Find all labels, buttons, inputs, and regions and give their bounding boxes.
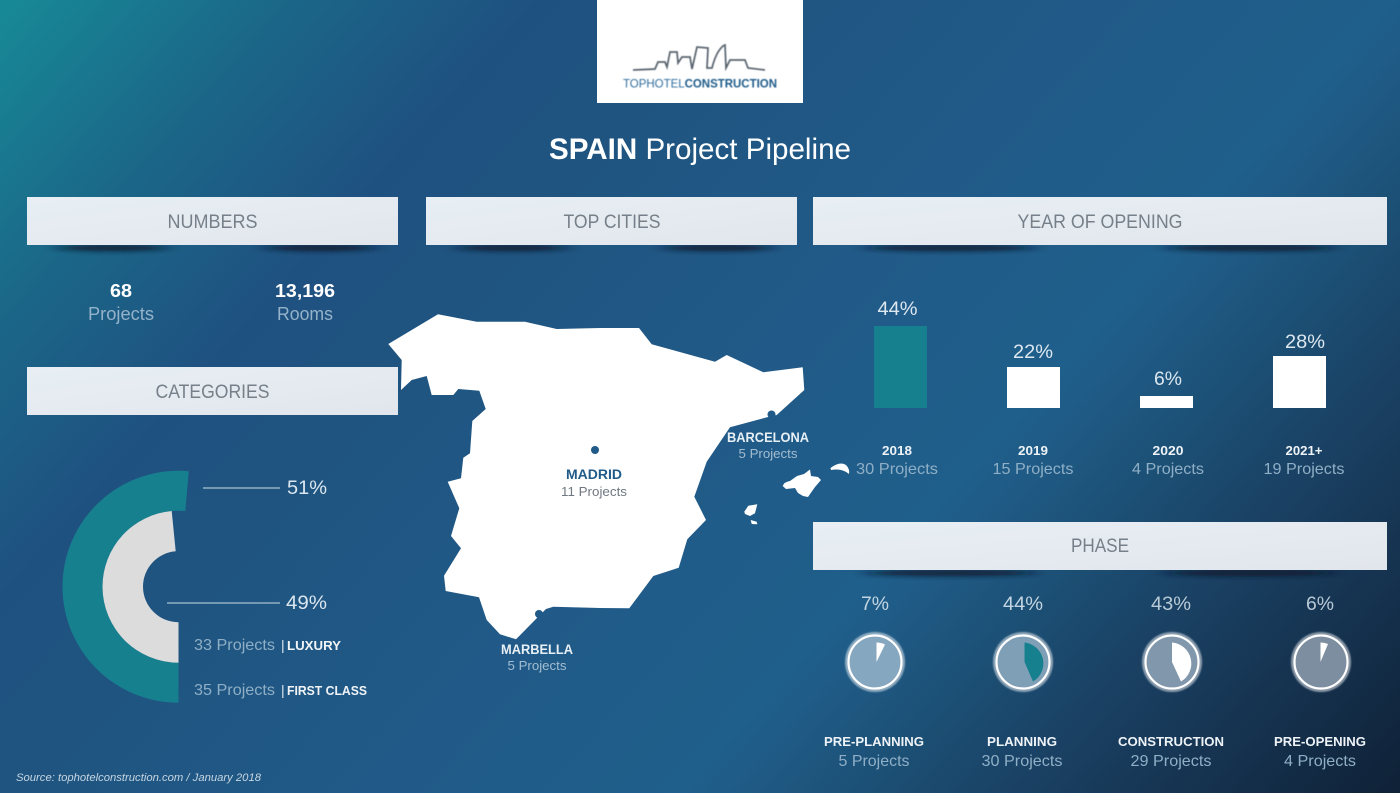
panel header: top cities: TOP CITIES (564, 212, 660, 233)
legend: luxury: LUXURY (287, 638, 341, 653)
legend: luxury (194, 637, 341, 654)
island: formentera (751, 520, 757, 524)
island: ibiza (744, 504, 757, 516)
bar: 2019: 22% (1013, 342, 1053, 363)
chart: categories donut (62, 471, 189, 703)
phase: planning: 44% (1003, 594, 1043, 615)
icon: skyline (633, 45, 765, 70)
panel header: year of opening: YEAR OF OPENING (1018, 212, 1182, 233)
phase: planning: 30 Projects (982, 753, 1062, 770)
legend: luxury: | (281, 637, 285, 653)
logo (597, 0, 803, 103)
stat: rooms: 13,196 (275, 281, 335, 301)
bar: 2019: 2019 (1018, 443, 1048, 458)
legend: first class: FIRST CLASS (287, 683, 367, 698)
panel header: phase (813, 522, 1387, 576)
pie: 6% (1291, 632, 1351, 692)
bar: 2018 (856, 299, 938, 478)
city: marbella: MARBELLA (501, 642, 573, 657)
phase: pre-opening (1274, 594, 1366, 770)
phase: pre-opening: 4 Projects (1284, 753, 1356, 770)
bar: 2021+ (1264, 332, 1344, 478)
bar: 2021+: 19 Projects (1264, 461, 1344, 478)
bar: 2021+: 2021+ (1286, 443, 1323, 458)
phase: construction: 29 Projects (1130, 753, 1212, 770)
phase: pre-opening: 6% (1306, 594, 1334, 615)
pie: 44% (993, 632, 1053, 692)
island: menorca (830, 464, 849, 474)
legend: luxury: 33 Projects (194, 637, 275, 654)
phase: planning (982, 594, 1062, 770)
callout: 49%: 49% (286, 593, 327, 614)
logo wordmark: TOPHOTELCONSTRUCTION (623, 76, 777, 90)
segment: luxury 49% (102, 511, 178, 663)
city: marbella (501, 610, 573, 673)
phase: pre-opening: PRE-OPENING (1274, 734, 1366, 749)
segment: first class 51% (62, 471, 189, 703)
bar: 2020: 4 Projects (1132, 461, 1204, 478)
bar: 2020: 6% (1154, 369, 1182, 390)
phase: planning: PLANNING (987, 734, 1057, 749)
panel header: top cities (426, 197, 797, 251)
stat: projects: Projects (88, 304, 154, 324)
callout: 51%: 51% (287, 478, 327, 499)
legend: first class: | (281, 682, 285, 698)
bar: 2020 (1132, 369, 1204, 478)
bar: 2019 (992, 342, 1074, 478)
stat: rooms (275, 281, 335, 324)
bar: 2021+: 28% (1285, 332, 1325, 353)
phase: pre-planning (824, 594, 924, 770)
bar: 2018: 2018 (882, 443, 912, 458)
city: barcelona: BARCELONA (727, 430, 809, 445)
legend: first class (194, 682, 367, 699)
island: mallorca (783, 470, 821, 497)
panel header: numbers: NUMBERS (168, 212, 258, 233)
bar: 2018: 30 Projects (856, 461, 938, 478)
phase: construction: 43% (1151, 594, 1191, 615)
stat: projects: 68 (110, 281, 132, 301)
phase: construction: CONSTRUCTION (1118, 734, 1224, 749)
phase: pre-planning: PRE-PLANNING (824, 734, 924, 749)
stat: rooms: Rooms (277, 304, 333, 324)
bar: 2018: 44% (878, 299, 918, 320)
panel header: categories: CATEGORIES (156, 382, 270, 403)
panel header: phase: PHASE (1071, 536, 1129, 557)
mainland (388, 314, 804, 639)
city: barcelona: 5 Projects (738, 446, 798, 461)
map: spain (388, 314, 849, 639)
stat: projects (88, 281, 154, 324)
pie: 43% (1142, 632, 1202, 692)
panel header: year of opening (813, 197, 1387, 251)
city: madrid: MADRID (566, 467, 622, 482)
panel header: categories (27, 367, 398, 415)
bar: 2019: 15 Projects (992, 461, 1074, 478)
phase: construction (1118, 594, 1224, 770)
phase: pre-planning: 5 Projects (838, 753, 910, 770)
city: madrid: 11 Projects (561, 484, 628, 499)
legend: first class: 35 Projects (194, 682, 275, 699)
bar chart: year of opening (856, 299, 1344, 478)
title: SPAIN Project Pipeline (549, 133, 851, 166)
city: marbella: 5 Projects (508, 658, 567, 673)
pie: 7% (845, 632, 905, 692)
panel header: numbers (27, 197, 398, 251)
city: madrid (561, 446, 628, 499)
source note: Source: tophotelconstruction.com / January 2018 (16, 772, 262, 784)
bar: 2020: 2020 (1152, 443, 1184, 458)
callout: 51% (203, 478, 327, 499)
phase: pre-planning: 7% (861, 594, 889, 615)
city: barcelona (727, 410, 809, 461)
